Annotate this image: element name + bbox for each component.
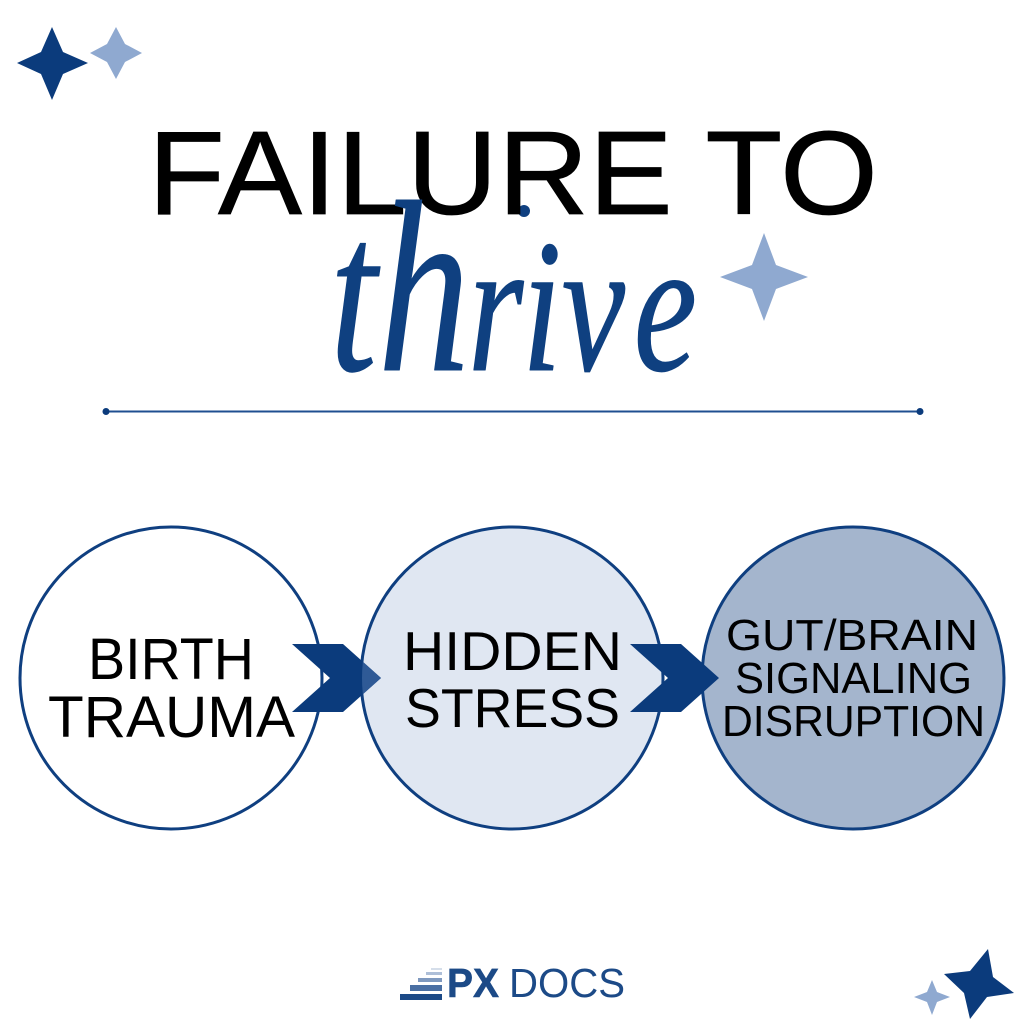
- divider line with end dots: [102, 408, 924, 415]
- text: gut brain signaling disruption: [722, 611, 985, 746]
- text: logo wordmark: PX: [447, 960, 499, 1006]
- text: birth trauma: BIRTH: [88, 627, 254, 692]
- title: thrive script: i: [522, 201, 562, 412]
- panel: gut brain signaling disruption circle: [702, 527, 1004, 829]
- panel: hidden stress circle: [361, 527, 663, 829]
- decorative dot of script lettering: [518, 205, 530, 217]
- icon: large light star by title: [720, 233, 808, 321]
- text: gut brain signaling disruption: SIGNALING: [735, 654, 972, 703]
- text: logo wordmark: DOCS: [509, 960, 625, 1006]
- text: gut brain signaling disruption: GUT/BRAIN: [726, 611, 978, 660]
- icon: dark star top left: [17, 27, 88, 100]
- text: gut brain signaling disruption: DISRUPTION: [722, 697, 985, 746]
- icon: light star bottom right: [914, 980, 950, 1015]
- arrow: chevron two: [630, 644, 719, 712]
- title: thrive script: e: [634, 201, 697, 412]
- title: failure to: FAILURE TO: [148, 107, 878, 240]
- title: thrive script: r: [468, 201, 524, 412]
- icon: logo stair bars: [400, 968, 442, 1000]
- text: logo wordmark: [447, 960, 625, 1006]
- text: birth trauma: TRAUMA: [48, 685, 295, 750]
- text: hidden stress: HIDDEN: [403, 620, 622, 682]
- arrow: chevron one: [292, 644, 381, 712]
- icon: light star top left: [90, 27, 142, 79]
- icon: dark star bottom right: [944, 949, 1014, 1019]
- panel: birth trauma circle: [20, 527, 322, 829]
- title: thrive script: h: [378, 152, 470, 423]
- logo: px docs: [400, 960, 625, 1006]
- text: hidden stress: STRESS: [405, 677, 620, 739]
- title: thrive script: t: [330, 171, 381, 420]
- title: thrive script: v: [562, 201, 625, 412]
- text: birth trauma: [48, 627, 295, 750]
- text: hidden stress: [403, 620, 622, 739]
